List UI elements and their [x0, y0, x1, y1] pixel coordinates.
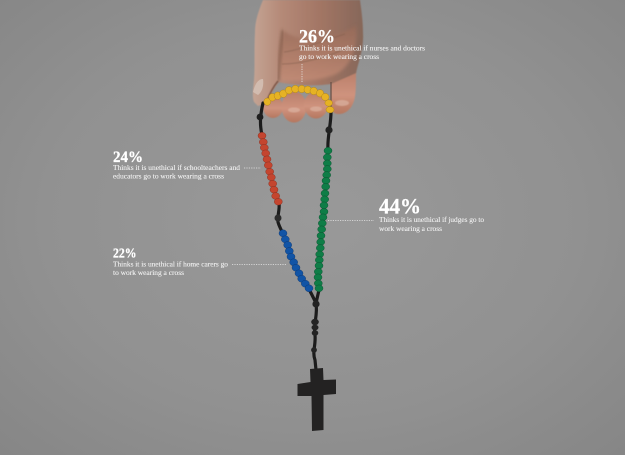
callout: 24% schoolteachers and educators: 24%: [113, 149, 143, 166]
yellow beads: [264, 85, 334, 113]
callout: 22% home carers: [113, 246, 287, 277]
finger gaps: [330, 82, 332, 108]
thumb crease: [278, 30, 283, 81]
callout: 26% nurses and doctors: [299, 26, 425, 82]
palm shadow: [279, 25, 356, 81]
callout: 22% home carers: 22%: [113, 246, 136, 260]
black cords and knots: [257, 103, 333, 370]
callout: 22% home carers: to work wearing a cross: [113, 268, 184, 277]
callout: 26% nurses and doctors: go to work wearing a cross: [299, 52, 379, 61]
fingertip highlights: [288, 108, 300, 112]
callout: 44% judges: 44%: [379, 194, 421, 218]
callout: 24% schoolteachers and educators: Thinks it is unethical if schoolteachers and: [113, 163, 240, 172]
callout: 26% nurses and doctors: 26%: [299, 26, 335, 48]
callout: 44% judges: Thinks it is unethical if judges go to: [379, 215, 484, 224]
blue beads: [279, 230, 313, 292]
fingers: [263, 72, 356, 122]
callout: 44% judges: work wearing a cross: [379, 224, 442, 233]
callout: 26% nurses and doctors: Thinks it is unethical if nurses and doctors: [299, 44, 425, 52]
callout: 24% schoolteachers and educators: [113, 149, 261, 180]
icon: cross: [298, 368, 336, 431]
red beads: [258, 132, 282, 205]
icon: hand: [253, 0, 363, 122]
thumbnail: [253, 79, 263, 95]
callout: 44% judges: [328, 194, 484, 233]
green beads: [314, 147, 332, 292]
palm and thumb: [253, 0, 363, 106]
palm creases: [284, 34, 345, 52]
callout: 24% schoolteachers and educators: educators go to work wearing a cross: [113, 172, 224, 180]
callout: 22% home carers: Thinks it is unethical if home carers go: [113, 260, 228, 268]
